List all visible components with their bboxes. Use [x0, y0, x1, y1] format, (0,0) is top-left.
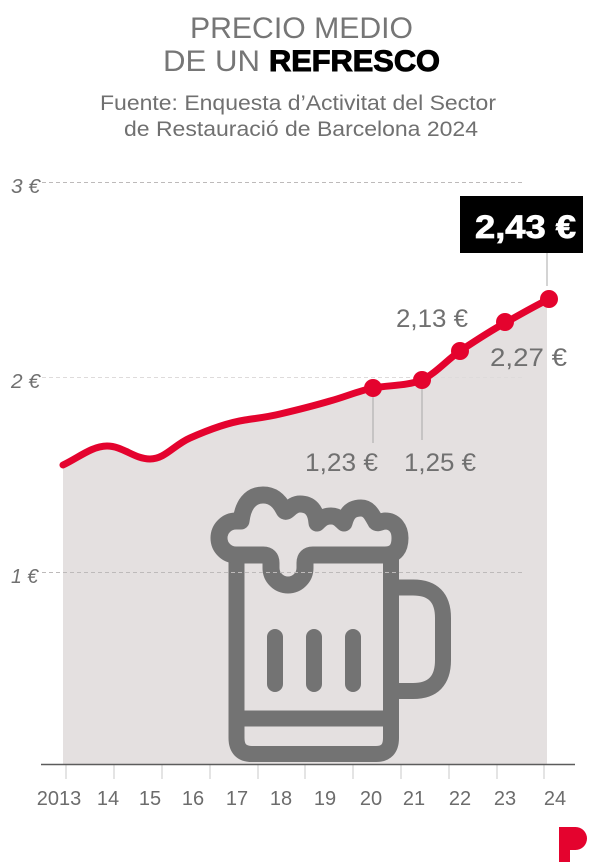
y axis labels — [10, 176, 41, 588]
source text: de Restauració de Barcelona 2024 — [124, 118, 478, 141]
callout: latest price: 2,43 € — [475, 209, 576, 245]
x axis year labels: 14 — [97, 788, 119, 810]
x axis year labels: 17 — [226, 788, 248, 810]
x axis year labels: 15 — [139, 788, 161, 810]
source text — [100, 92, 496, 141]
grid lines — [42, 182, 523, 572]
x axis year labels: 2013 — [37, 788, 81, 810]
source text: Fuente: Enquesta d’Activitat del Sector — [100, 92, 496, 115]
data points — [364, 290, 558, 397]
x axis year labels: 20 — [360, 788, 382, 810]
value labels: 2,13 € — [396, 305, 468, 333]
y axis labels: 2 € — [10, 371, 41, 393]
y axis labels: 3 € — [11, 176, 41, 198]
x axis — [41, 764, 575, 779]
x axis year labels — [37, 788, 566, 810]
area under price line — [63, 300, 547, 764]
x axis year labels: 23 — [494, 788, 516, 810]
title: DE UN — [163, 45, 260, 78]
x axis year labels: 19 — [314, 788, 336, 810]
callout: latest price — [460, 196, 583, 253]
x axis year labels: 18 — [270, 788, 292, 810]
value labels: 2,27 € — [490, 344, 567, 372]
icon: publisher logo — [559, 827, 587, 862]
x axis year labels: 16 — [182, 788, 204, 810]
icon: beer mug — [219, 495, 443, 754]
x axis year labels: 22 — [449, 788, 471, 810]
value labels — [305, 305, 567, 477]
leader lines — [373, 253, 547, 443]
x axis year labels: 21 — [403, 788, 425, 810]
value labels: 1,23 € — [305, 449, 378, 477]
y axis labels: 1 € — [11, 566, 39, 588]
title: PRECIO MEDIO — [190, 12, 413, 45]
x axis year labels: 24 — [544, 788, 566, 810]
title: REFRESCO — [269, 45, 440, 78]
price line — [63, 299, 549, 465]
title — [163, 12, 440, 78]
value labels: 1,25 € — [404, 449, 476, 477]
